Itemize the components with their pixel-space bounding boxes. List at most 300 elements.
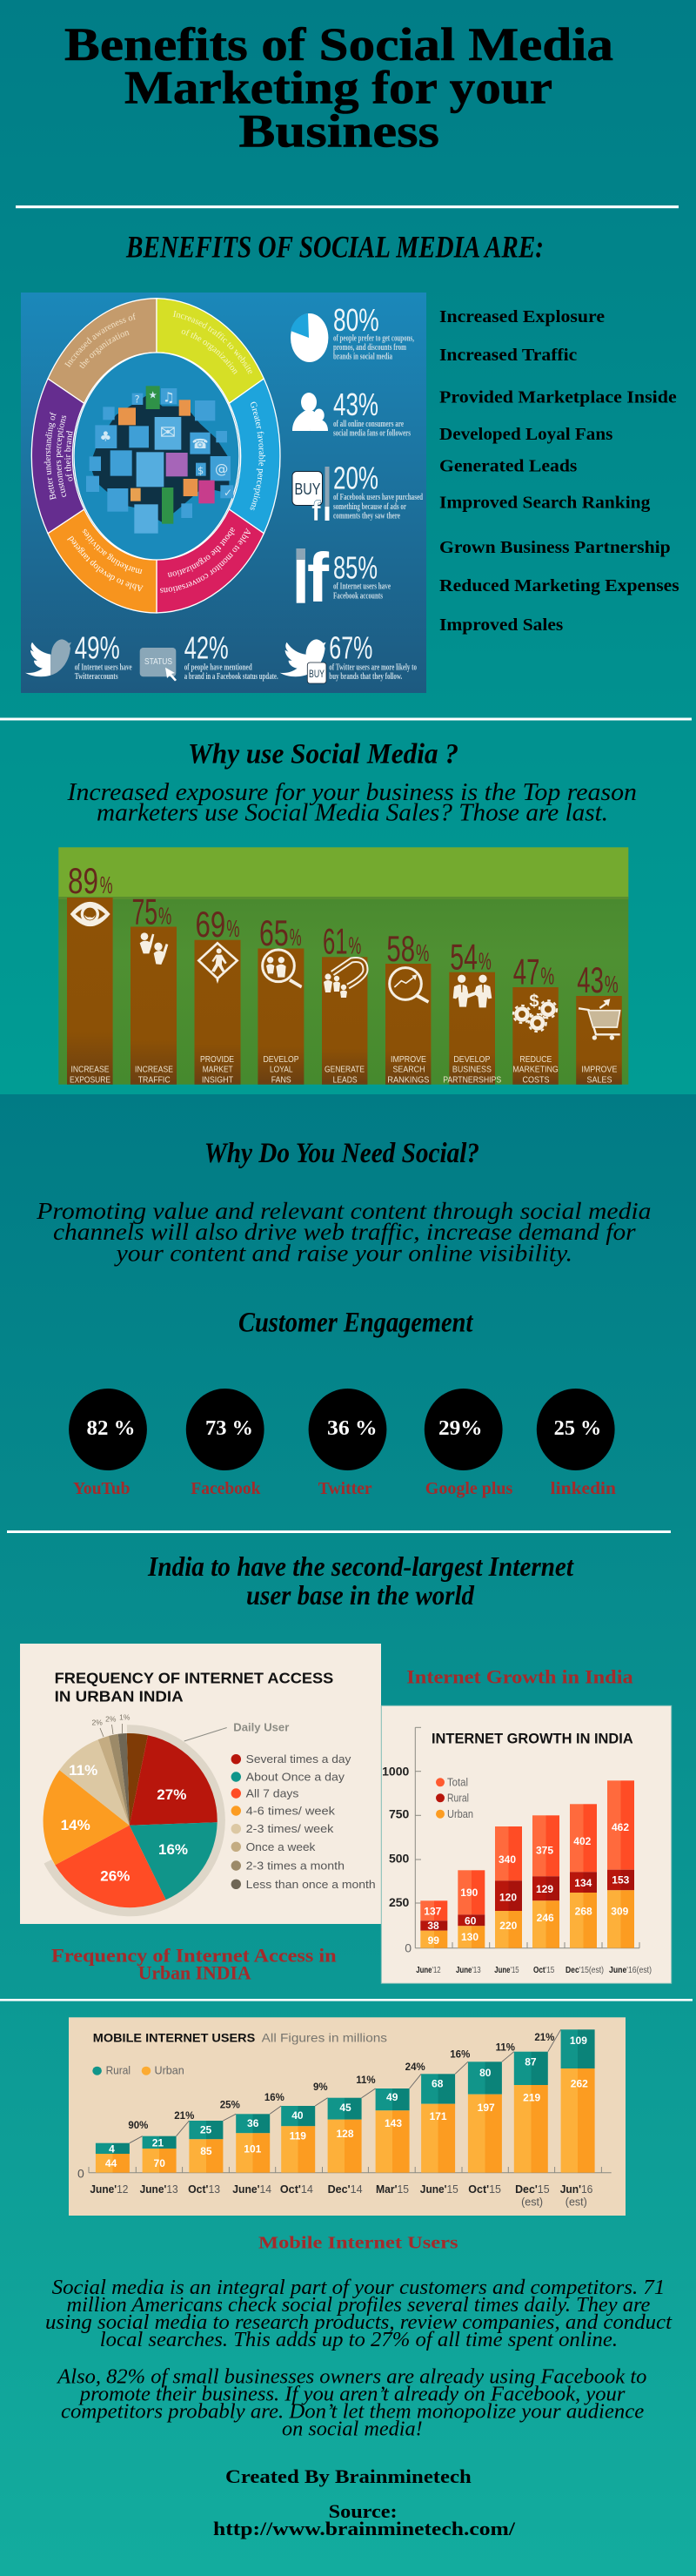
engagement: Facebook: Facebook <box>191 1479 261 1498</box>
list: benefits: Generated Leads <box>439 457 578 476</box>
percentages: 89 <box>68 860 98 901</box>
x axis labels: Oct'13 <box>188 2183 220 2196</box>
growth percentages: 25% <box>220 2100 240 2110</box>
caption: internet growth: Internet Growth in India <box>406 1665 633 1687</box>
source: Source: <box>329 2500 398 2522</box>
chart title <box>93 2031 387 2045</box>
percentages: 43 <box>577 959 604 1000</box>
pie chart <box>44 1712 289 1912</box>
growth percentages: 90% <box>128 2121 148 2131</box>
icon: buy tag with bar: BUY <box>294 481 320 498</box>
chart title: MOBILE INTERNET USERS <box>93 2031 255 2045</box>
chart: six-part benefit ring: Increased traffic to website <box>172 310 252 374</box>
legend: All 7 days <box>246 1786 299 1800</box>
bar values: 137 <box>424 1905 442 1917</box>
icon: status button with cursor <box>140 648 177 681</box>
percentages: % <box>226 915 240 942</box>
y axis labels: 250 <box>389 1895 410 1909</box>
axes <box>415 1727 639 1948</box>
bar values: 143 <box>385 2117 402 2129</box>
percentages: % <box>290 924 301 951</box>
chart title <box>55 1669 333 1705</box>
icon: people <box>292 393 328 431</box>
percentages: 47 <box>513 951 539 992</box>
text: top reason: marketers use Social Media Sales? Those are last. <box>97 800 608 827</box>
bar labels: DEVELOP <box>263 1054 299 1065</box>
percentages: % <box>158 903 171 930</box>
stat: 20%: something because of ads or <box>333 502 406 512</box>
legend: Total <box>447 1776 468 1788</box>
stat: 67%: 67% <box>329 630 372 666</box>
icon cluster: app cubes: ✉ <box>160 422 176 444</box>
engagement: Twitter: Twitter <box>318 1479 372 1498</box>
bar values: 45 <box>339 2102 351 2114</box>
y axis labels: 1000 <box>382 1764 410 1778</box>
chart title: INTERNET GROWTH IN INDIA <box>432 1730 633 1746</box>
text: integral part paragraph: local searches. This adds up to 27% of all time spent online. <box>100 2329 618 2351</box>
engagement: Facebook <box>186 1389 264 1498</box>
chart title: All Figures in millions <box>262 2031 387 2045</box>
panel: mobile internet users <box>69 2017 626 2216</box>
bar values: 309 <box>611 1905 629 1917</box>
caption: frequency of internet access <box>51 1944 337 1983</box>
bars <box>67 898 622 1085</box>
bar values: 38 <box>427 1920 439 1932</box>
bar values: 462 <box>612 1821 629 1833</box>
legend: Rural <box>106 2065 130 2077</box>
chart: six-part benefit ring <box>31 298 281 614</box>
stat: 43%: 43% <box>333 387 378 422</box>
bar values: 134 <box>574 1877 592 1889</box>
bar values: 40 <box>291 2109 304 2122</box>
bar values: 109 <box>570 2035 587 2047</box>
engagement: Google plus <box>425 1389 513 1498</box>
stat: 67%: of Twitter users are more likely to <box>329 662 417 672</box>
text: promoting value: channels will also drive web traffic, increase demand for <box>53 1219 636 1245</box>
bar values: 80 <box>479 2067 492 2079</box>
bar values: 375 <box>536 1844 553 1856</box>
list: benefits: Grown Business Partnership <box>439 538 671 557</box>
legend: About Once a day <box>246 1771 345 1783</box>
bar labels: SALES <box>586 1074 612 1085</box>
bar labels <box>70 1054 617 1085</box>
stat: 67% <box>329 630 417 682</box>
stat: 20%: of Facebook users have purchased <box>333 493 423 502</box>
bar values: 44 <box>105 2157 117 2169</box>
x axis labels: June'16(est) <box>609 1965 652 1975</box>
percentages: % <box>348 932 361 958</box>
percentages: 58 <box>386 928 415 969</box>
bar values: 87 <box>525 2056 537 2068</box>
bar values: 70 <box>154 2157 165 2169</box>
growth percentages: 16% <box>450 2050 470 2061</box>
bar labels: FANS <box>271 1074 291 1085</box>
bar labels: INCREASE <box>135 1065 173 1075</box>
connectors <box>130 2029 561 2143</box>
y axis labels <box>382 1764 412 1955</box>
x axis labels: (est) <box>521 2196 543 2208</box>
chart: six-part benefit ring: Increased awareness of <box>64 313 136 367</box>
icon cluster: app cubes: ★ <box>149 388 157 400</box>
legend <box>436 1776 473 1820</box>
pie chart: 11% <box>69 1762 97 1779</box>
stat: 80%: promos, and discounts from <box>333 343 406 353</box>
legend <box>92 2065 184 2077</box>
bar values: 85 <box>200 2145 212 2157</box>
pie chart: 2% <box>92 1718 103 1726</box>
x axis labels: Dec'15(est) <box>566 1965 604 1975</box>
bar values: 153 <box>612 1873 630 1886</box>
heading: India internet user base: user base in the world <box>246 1579 475 1611</box>
stat: 42% <box>184 630 278 682</box>
chart title: FREQUENCY OF INTERNET ACCESS <box>55 1669 333 1686</box>
bar values: 130 <box>461 1931 478 1943</box>
percentages: 61 <box>323 920 348 961</box>
icon cluster: app cubes: $ <box>197 464 204 476</box>
bar values: 340 <box>499 1853 516 1866</box>
stat: 49% <box>75 630 132 682</box>
stat: 80%: brands in social media <box>333 352 392 361</box>
pie chart: 27% <box>157 1786 186 1803</box>
list: benefits: Reduced Marketing Expenses <box>439 576 679 595</box>
icon cluster: app cubes: ☎ <box>191 436 209 452</box>
stat: 80%: 80% <box>333 302 379 338</box>
stat: 43% <box>333 387 411 439</box>
stat: 43%: social media fans or followers <box>333 429 411 439</box>
text: top reason <box>66 779 637 827</box>
list: benefits: Increased Traffic <box>439 346 577 365</box>
growth percentages: 24% <box>405 2062 425 2073</box>
bar labels: LEADS <box>333 1074 358 1085</box>
x axis labels <box>90 2183 592 2208</box>
bar labels: INCREASE <box>71 1065 110 1075</box>
bar labels: TRAFFIC <box>138 1074 171 1085</box>
chart: six-part benefit ring: marketing activities <box>82 529 143 575</box>
legend: 2-3 times/ week <box>246 1822 334 1835</box>
heading: India internet user base <box>147 1550 574 1611</box>
text: integral part paragraph <box>45 2277 673 2351</box>
stat: 42%: of people have mentioned <box>184 662 252 672</box>
text: integral part paragraph: million Americans check social profiles several times daily. They are <box>66 2294 651 2317</box>
x axis labels: Jun'16 <box>560 2183 592 2196</box>
percentages: % <box>416 939 429 966</box>
x axis labels: Oct'14 <box>280 2183 313 2196</box>
percentages: % <box>100 871 113 898</box>
bar labels: IMPROVE <box>391 1054 426 1065</box>
stat: 20% <box>333 461 423 521</box>
bar values <box>105 2035 588 2169</box>
legend: 2-3 times a month <box>246 1860 345 1872</box>
panel: social media statistics image <box>21 293 426 693</box>
legend: Less than once a month <box>246 1878 376 1891</box>
bar values: 268 <box>575 1905 592 1917</box>
legend: Rural <box>447 1792 469 1804</box>
list: benefits: Developed Loyal Fans <box>439 425 613 444</box>
stat: 67%: buy brands that they follow. <box>329 672 403 682</box>
x axis labels: Mar'15 <box>376 2183 409 2196</box>
growth percentages <box>128 2033 554 2131</box>
text: facebook paragraph: competitors probably are. Don’t let them monopolize your audience <box>61 2400 645 2423</box>
list: benefits: Increased Explosure <box>439 307 605 326</box>
bar values: 220 <box>499 1920 518 1932</box>
x axis labels: Oct'15 <box>533 1965 554 1975</box>
y axis labels: 750 <box>389 1806 410 1820</box>
bar values: 171 <box>430 2110 447 2122</box>
percentages: 65 <box>259 912 289 953</box>
stat: 49%: Twitteraccounts <box>75 672 118 682</box>
pie chart: 1% <box>119 1712 130 1721</box>
bar values: 219 <box>523 2091 541 2103</box>
chart: six-part benefit ring: the organization <box>79 331 130 369</box>
text: facebook paragraph <box>56 2365 646 2440</box>
title: Business <box>238 104 439 157</box>
icons right half <box>390 968 620 1040</box>
x axis labels: Dec'14 <box>328 2183 363 2196</box>
x axis labels: June'15 <box>420 2183 458 2196</box>
bar values: 99 <box>428 1934 439 1947</box>
bar values <box>424 1821 630 1947</box>
text: integral part paragraph: using social media to research products, review companies, and conduct <box>45 2311 673 2334</box>
caption: frequency of internet access: Frequency of Internet Access in <box>51 1944 337 1966</box>
stat: 85% <box>333 549 391 602</box>
chart: six-part benefit ring: Better understanding of <box>44 412 56 500</box>
text: facebook paragraph: promote their business. If you aren’t already on Facebook, your <box>78 2383 626 2405</box>
bar labels: INSIGHT <box>202 1074 233 1085</box>
growth percentages: 21% <box>174 2111 194 2122</box>
icon cluster: app cubes: ? <box>135 393 140 406</box>
icon: buy tag with bar <box>292 467 329 527</box>
text: integral part paragraph: Social media is an integral part of your customers and competitors. 71 <box>52 2277 665 2299</box>
stat: 20%: 20% <box>333 461 378 496</box>
bar labels: EXPOSURE <box>70 1074 110 1085</box>
y axis labels: 0 <box>405 1941 412 1955</box>
icon: twitter bird with buy tag <box>280 639 326 683</box>
bar values: 21 <box>152 2136 164 2149</box>
bar labels: PARTNERSHIPS <box>443 1074 501 1085</box>
chart: six-part benefit ring: of the organization <box>181 329 238 374</box>
y axis labels: 500 <box>389 1851 410 1865</box>
legend: Once a week <box>246 1840 316 1853</box>
stat: 49%: 49% <box>75 630 120 666</box>
bar labels: MARKET <box>203 1065 233 1075</box>
text: facebook paragraph: Also, 82% of small businesses owners are already using Facebook to <box>56 2365 646 2388</box>
bar values: 129 <box>536 1883 553 1895</box>
bar chart: reasons for using social media <box>58 847 628 1085</box>
heading: why use social media: Why use Social Media ? <box>188 739 458 770</box>
icon: twitter bird with buy tag: BUY <box>309 669 325 680</box>
pie chart: 2% <box>105 1714 117 1723</box>
text: facebook paragraph: on social media! <box>282 2418 423 2440</box>
pie chart: 26% <box>100 1867 130 1884</box>
stacked bars <box>96 2029 595 2173</box>
bar values: 402 <box>573 1835 592 1847</box>
text: promoting value <box>36 1198 651 1266</box>
growth percentages: 21% <box>534 2033 554 2043</box>
bar values: 190 <box>460 1887 478 1899</box>
stat: 85%: Facebook accounts <box>333 592 383 602</box>
x axis labels: June'13 <box>140 2183 178 2196</box>
x axis labels: (est) <box>566 2196 587 2208</box>
bar labels: COSTS <box>522 1074 550 1085</box>
list: benefits: Improved Search Ranking <box>439 493 650 512</box>
engagement: Twitter <box>309 1389 386 1498</box>
heading: customer engagement: Customer Engagement <box>238 1308 473 1339</box>
legend: Urban <box>155 2065 184 2077</box>
icon cluster: app cubes: @ <box>215 461 228 477</box>
engagement: YouTube: 82 % <box>87 1417 136 1440</box>
bar labels: LOYAL <box>270 1065 293 1075</box>
bar labels: GENERATE <box>325 1065 365 1075</box>
engagement: LinkedIn: linkedin <box>551 1479 616 1498</box>
list: benefits <box>439 307 679 635</box>
stat: 85%: of Internet users have <box>333 582 391 592</box>
bar values: 36 <box>247 2117 259 2129</box>
legend: 4-6 times/ week <box>246 1804 336 1818</box>
chart: six-part benefit ring: about the organization <box>167 528 235 577</box>
title: Marketing for your <box>124 61 552 113</box>
percentages: % <box>478 947 492 974</box>
bar values: 60 <box>465 1915 477 1927</box>
legend <box>231 1752 376 1891</box>
engagement: Google plus: Google plus <box>425 1479 513 1498</box>
bar values: 128 <box>336 2128 354 2140</box>
text: promoting value: your content and raise your online visibility. <box>113 1240 572 1266</box>
bar labels: SEARCH <box>393 1065 425 1075</box>
caption: mobile internet users: Mobile Internet Users <box>258 2234 458 2253</box>
icon cluster: app cubes: ♣ <box>99 429 111 445</box>
icon: magnet <box>324 959 365 998</box>
chart: six-part benefit ring: Greater favorable perceptions <box>251 402 266 510</box>
percentages: 69 <box>195 904 225 945</box>
background: lower section <box>0 1094 696 2576</box>
icon: facebook bar <box>297 539 329 616</box>
bar labels: DEVELOP <box>453 1054 490 1065</box>
bar values: 120 <box>499 1891 517 1903</box>
legend: Urban <box>447 1808 473 1820</box>
x axis labels: June'13 <box>456 1965 481 1975</box>
chart: six-part benefit ring: Able to develop targeted <box>67 535 144 592</box>
legend: Several times a day <box>246 1752 351 1766</box>
title <box>64 18 613 157</box>
stat: 20%: comments they saw there <box>333 512 400 521</box>
stat: 80% <box>333 302 414 361</box>
x axis labels: June'14 <box>232 2183 271 2196</box>
icon cluster: app cubes <box>86 386 233 534</box>
source: http://www.brainminetech.com/ <box>213 2518 516 2539</box>
stat: 49%: of Internet users have <box>75 662 132 672</box>
engagement: Facebook: 73 % <box>205 1417 253 1440</box>
stat: 80%: of people prefer to get coupons, <box>333 334 414 344</box>
growth percentages: 11% <box>356 2075 376 2086</box>
bar values: 197 <box>478 2102 495 2114</box>
growth percentages: 11% <box>496 2043 515 2054</box>
growth percentages: 16% <box>264 2093 284 2103</box>
engagement: YouTube <box>69 1389 147 1498</box>
bar values: 25 <box>200 2124 211 2136</box>
bar values: 101 <box>244 2143 262 2156</box>
bar values: 49 <box>386 2091 398 2103</box>
caption: frequency of internet access: Urban INDIA <box>138 1961 251 1983</box>
panel: mobile internet users: 0 <box>77 2167 84 2181</box>
x axis labels: June'12 <box>90 2183 128 2196</box>
icon cluster: app cubes: ♫ <box>163 390 175 406</box>
stat: 85%: 85% <box>333 549 378 585</box>
bar values: 68 <box>432 2077 444 2089</box>
heading: benefits: BENEFITS OF SOCIAL MEDIA ARE: <box>125 230 544 265</box>
x axis labels: June'12 <box>416 1965 441 1975</box>
x axis labels: Oct'15 <box>468 2183 501 2196</box>
text: top reason: Increased exposure for your business is the Top reason <box>66 779 637 806</box>
icons right half: $ <box>529 992 539 1012</box>
icons left half <box>70 902 302 988</box>
percentages: 54 <box>450 936 478 977</box>
chart: six-part benefit ring: customers perceptions <box>57 415 66 497</box>
bar labels: IMPROVE <box>581 1065 617 1075</box>
heading: why do you need social: Why Do You Need Social? <box>204 1138 479 1169</box>
pie chart: 14% <box>61 1817 90 1833</box>
text: promoting value: Promoting value and relevant content through social media <box>36 1198 651 1224</box>
bar values: 4 <box>109 2143 115 2156</box>
icon: status button with cursor: STATUS <box>144 656 172 667</box>
chart: six-part benefit ring: of their brand <box>64 431 73 481</box>
stacked bars <box>420 1780 634 1948</box>
stat: 42%: a brand in a Facebook status update. <box>184 672 278 682</box>
credit: Created By Brainminetech <box>225 2465 472 2487</box>
axis <box>89 2167 612 2173</box>
panel: frequency of internet access <box>20 1644 381 1924</box>
title: Benefits of Social Media <box>64 18 613 71</box>
pie chart: 16% <box>158 1841 188 1858</box>
bar values: 246 <box>537 1912 554 1924</box>
engagement: LinkedIn <box>537 1389 616 1498</box>
engagement: Google plus: 29% <box>438 1417 483 1440</box>
bar labels: BUSINESS <box>452 1065 492 1075</box>
bar labels: MARKETING <box>512 1065 559 1075</box>
bar values: 262 <box>571 2077 588 2089</box>
icon: buy tag with bar: f <box>311 495 321 527</box>
icon: twitter bird half shaded <box>25 639 71 676</box>
list: benefits: Provided Marketplace Inside <box>439 388 677 407</box>
panel: internet growth in india <box>381 1705 672 1983</box>
stat: 43%: of all online consumers are <box>333 420 404 429</box>
icon: pie 80% <box>291 313 328 362</box>
background: upper section <box>0 0 696 1094</box>
chart title: IN URBAN INDIA <box>55 1688 184 1705</box>
heading: India internet user base: India to have the second-largest Internet <box>147 1550 574 1582</box>
percentages: % <box>605 971 619 998</box>
icon cluster: app cubes: ✓ <box>224 487 232 499</box>
bar values: 119 <box>290 2129 306 2142</box>
icon: facebook bar: f <box>307 539 329 616</box>
x axis labels: June'15 <box>494 1965 519 1975</box>
percentages <box>68 860 619 1000</box>
bar labels: RANKINGS <box>387 1074 429 1085</box>
engagement: LinkedIn: 25 % <box>554 1417 601 1440</box>
stat: 42%: 42% <box>184 630 229 666</box>
source <box>213 2500 516 2539</box>
bar labels: REDUCE <box>519 1054 552 1065</box>
percentages: 75 <box>132 891 157 932</box>
growth percentages: 9% <box>313 2082 328 2093</box>
engagement: Twitter: 36 % <box>327 1417 378 1440</box>
chart: six-part benefit ring: Able to monitor conversations <box>160 528 251 593</box>
x axis labels <box>416 1965 652 1975</box>
engagement: YouTube: YouTub <box>73 1479 130 1498</box>
percentages: % <box>540 962 554 989</box>
bar labels: PROVIDE <box>200 1054 234 1065</box>
x axis labels: Dec'15 <box>515 2183 550 2196</box>
list: benefits: Improved Sales <box>439 615 564 635</box>
